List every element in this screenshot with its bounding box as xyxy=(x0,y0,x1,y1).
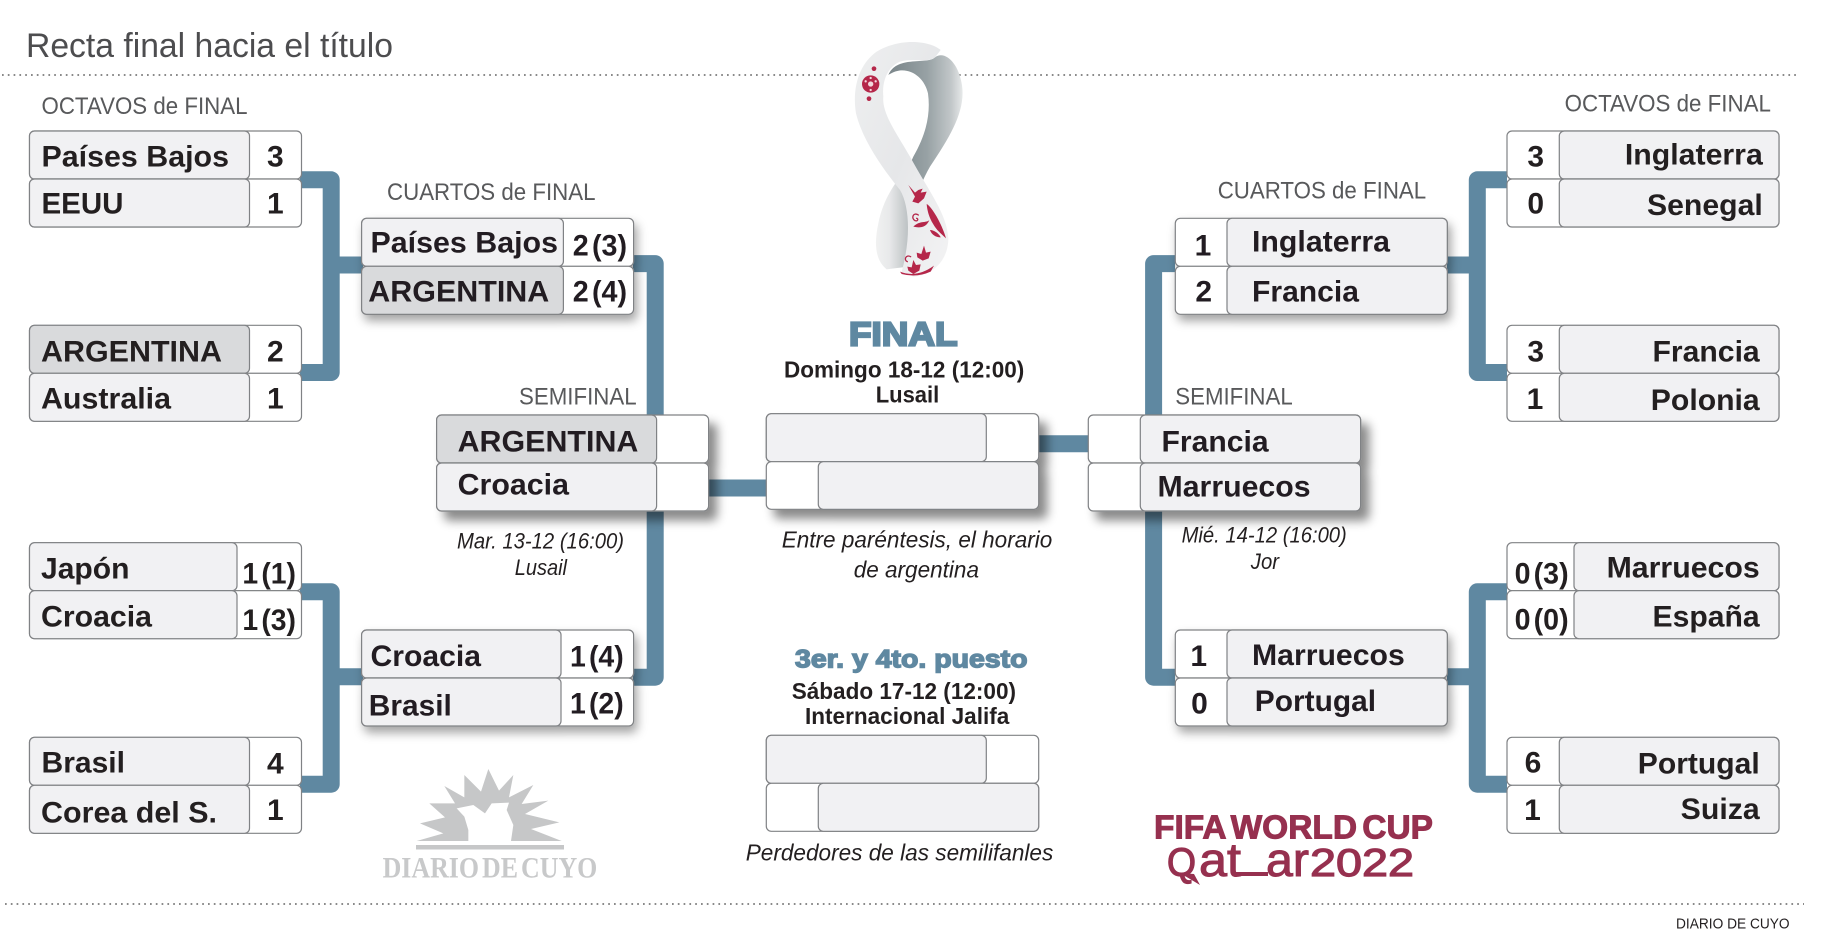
heading: semifinal left: SEMIFINAL xyxy=(519,384,637,411)
semifinal right date and venue: Mié. 14-12 (16:00) xyxy=(1182,522,1347,547)
match: semifinal Francia vs Marruecos: Marruecos xyxy=(1158,471,1311,504)
emblem upper floral ornament xyxy=(908,185,946,238)
match: cuartos Marruecos vs Portugal: Marruecos xyxy=(1252,639,1405,672)
match: Inglaterra vs Senegal xyxy=(1507,131,1779,227)
match: Portugal vs Suiza: 1 xyxy=(1524,794,1541,827)
match: Japón vs Croacia: Japón xyxy=(41,552,130,585)
match: Japón vs Croacia: 1 (3) xyxy=(242,604,296,637)
heading: cuartos left: CUARTOS de FINAL xyxy=(387,179,596,206)
third place date and venue: Sábado 17-12 (12:00) xyxy=(792,678,1016,704)
logo sun rays xyxy=(417,769,562,841)
note: horario argentina: Entre paréntesis, el horario xyxy=(782,527,1052,553)
match: Países Bajos vs EEUU xyxy=(30,131,302,227)
match: cuartos Inglaterra vs Francia xyxy=(1175,218,1447,314)
third place date and venue: Internacional Jalifa xyxy=(805,703,1010,729)
match: cuartos Inglaterra vs Francia: 2 xyxy=(1195,276,1212,309)
semifinal right date and venue: Jor xyxy=(1250,549,1281,574)
match: Brasil vs Corea del S.: Corea del S. xyxy=(41,796,217,829)
match: Brasil vs Corea del S. xyxy=(30,737,302,833)
heading: final: FINAL xyxy=(849,316,958,354)
heading: semifinal right: SEMIFINAL xyxy=(1175,384,1293,411)
match: Argentina vs Australia: 1 xyxy=(267,382,284,415)
match: Japón vs Croacia: Croacia xyxy=(41,601,152,634)
match: cuartos Croacia vs Brasil: Brasil xyxy=(369,690,452,723)
heading: cuartos right: CUARTOS de FINAL xyxy=(1218,177,1426,204)
semifinal right date and venue xyxy=(1182,522,1347,574)
match: Francia vs Polonia: 3 xyxy=(1527,336,1544,369)
match: Portugal vs Suiza: 6 xyxy=(1525,746,1541,779)
match: cuartos Países Bajos vs Argentina: 2 (4) xyxy=(573,276,627,309)
semifinal left date and venue: Mar. 13-12 (16:00) xyxy=(457,528,624,553)
match: Francia vs Polonia xyxy=(1507,325,1779,421)
match: semifinal Argentina vs Croacia: ARGENTINA xyxy=(458,426,638,459)
match: cuartos Países Bajos vs Argentina xyxy=(362,218,634,314)
match: Francia vs Polonia: Francia xyxy=(1652,336,1760,369)
match: Marruecos vs España: 0 (3) xyxy=(1515,557,1569,590)
match: cuartos Croacia vs Brasil: 1 (2) xyxy=(570,687,624,720)
final date and venue: Lusail xyxy=(876,382,939,408)
logo: FIFA World Cup Qatar 2022 xyxy=(1154,809,1433,886)
emblem upper back ribbon xyxy=(888,55,963,208)
logo Qatar ar: ar xyxy=(1266,833,1309,886)
match: Portugal vs Suiza: Portugal xyxy=(1638,747,1760,780)
match: cuartos Inglaterra vs Francia: Inglaterra xyxy=(1252,226,1390,259)
final date and venue xyxy=(784,356,1024,408)
emblem front ribbon xyxy=(855,42,948,277)
match: Portugal vs Suiza xyxy=(1507,737,1779,833)
match: cuartos Inglaterra vs Francia: 1 xyxy=(1195,230,1211,263)
match: semifinal Francia vs Marruecos xyxy=(1088,415,1361,511)
match: cuartos Países Bajos vs Argentina: ARGENTINA xyxy=(368,276,549,309)
match: cuartos Marruecos vs Portugal: Portugal xyxy=(1255,685,1376,718)
match: cuartos Países Bajos vs Argentina: 2 (3) xyxy=(573,230,627,263)
match: Francia vs Polonia: Polonia xyxy=(1651,384,1760,417)
match: cuartos Países Bajos vs Argentina: Países Bajos xyxy=(370,227,558,260)
heading: octavos right: OCTAVOS de FINAL xyxy=(1565,91,1771,118)
match: cuartos Croacia vs Brasil xyxy=(362,630,634,726)
match: Países Bajos vs EEUU: 3 xyxy=(267,141,284,174)
logo wordmark: DIARIO DE CUYO xyxy=(383,852,597,885)
match: Argentina vs Australia xyxy=(30,325,302,421)
match: Japón vs Croacia: 1 (1) xyxy=(242,558,296,591)
heading: third place: 3er. y 4to. puesto xyxy=(795,645,1028,673)
match: Inglaterra vs Senegal: 0 xyxy=(1527,187,1544,220)
bracket connectors xyxy=(300,180,1507,784)
match: Inglaterra vs Senegal: Inglaterra xyxy=(1625,138,1763,171)
semifinal left date and venue xyxy=(457,528,624,580)
logo Qatar at: at xyxy=(1199,833,1241,886)
heading: octavos left: OCTAVOS de FINAL xyxy=(42,93,248,120)
match: Francia vs Polonia: 1 xyxy=(1527,383,1543,416)
match: Argentina vs Australia: ARGENTINA xyxy=(41,336,222,369)
match: Marruecos vs España: 0 (0) xyxy=(1515,603,1569,636)
match: Países Bajos vs EEUU: EEUU xyxy=(42,187,124,220)
match: cuartos Croacia vs Brasil: 1 (4) xyxy=(570,641,624,674)
match: Brasil vs Corea del S.: 1 xyxy=(267,794,284,827)
semifinal left date and venue: Lusail xyxy=(515,555,568,580)
icon: World Cup emblem xyxy=(855,42,963,277)
note: horario argentina xyxy=(782,527,1052,583)
note: perdedores: Perdedores de las semilifanles xyxy=(746,840,1054,866)
match: cuartos Inglaterra vs Francia: Francia xyxy=(1252,276,1359,309)
match: cuartos Marruecos vs Portugal: 0 xyxy=(1191,687,1208,720)
match: Inglaterra vs Senegal: Senegal xyxy=(1647,189,1763,222)
emblem lower floral ornament xyxy=(900,246,934,276)
match: Brasil vs Corea del S.: 4 xyxy=(267,747,284,780)
match: cuartos Croacia vs Brasil: Croacia xyxy=(370,640,481,673)
final date and venue: Domingo 18-12 (12:00) xyxy=(784,356,1024,382)
match: Países Bajos vs EEUU: 1 xyxy=(267,187,284,220)
match: final empty boxes xyxy=(766,414,1039,509)
credit: DIARIO DE CUYO xyxy=(1676,915,1790,932)
match: cuartos Marruecos vs Portugal xyxy=(1175,630,1447,726)
match: Marruecos vs España: España xyxy=(1652,601,1760,634)
match: Marruecos vs España: Marruecos xyxy=(1607,552,1760,585)
match: third place empty boxes xyxy=(766,735,1039,831)
match: Portugal vs Suiza: Suiza xyxy=(1681,793,1760,826)
match: Inglaterra vs Senegal: 3 xyxy=(1527,141,1544,174)
match: Argentina vs Australia: Australia xyxy=(41,382,171,415)
match: semifinal Argentina vs Croacia: Croacia xyxy=(458,468,569,501)
note: horario argentina: de argentina xyxy=(854,557,979,583)
emblem lower back loop xyxy=(876,173,918,269)
logo FIFA line: FIFA WORLD CUP xyxy=(1154,809,1433,846)
match: Países Bajos vs EEUU: Países Bajos xyxy=(42,141,229,174)
match: Argentina vs Australia: 2 xyxy=(267,336,284,369)
match: cuartos Marruecos vs Portugal: 1 xyxy=(1190,640,1207,673)
match: Marruecos vs España xyxy=(1507,543,1779,639)
third place date and venue xyxy=(792,678,1016,729)
match: semifinal Argentina vs Croacia xyxy=(437,415,709,511)
title: Recta final hacia el título xyxy=(26,27,393,65)
logo Qatar year: 2022 xyxy=(1310,842,1414,885)
match: Brasil vs Corea del S.: Brasil xyxy=(42,746,125,779)
match: Japón vs Croacia xyxy=(30,543,302,639)
logo: Diario de Cuyo xyxy=(383,769,597,885)
logo Qatar Q: Q xyxy=(1167,841,1196,885)
match: semifinal Francia vs Marruecos: Francia xyxy=(1162,426,1269,459)
emblem ball xyxy=(862,66,879,101)
